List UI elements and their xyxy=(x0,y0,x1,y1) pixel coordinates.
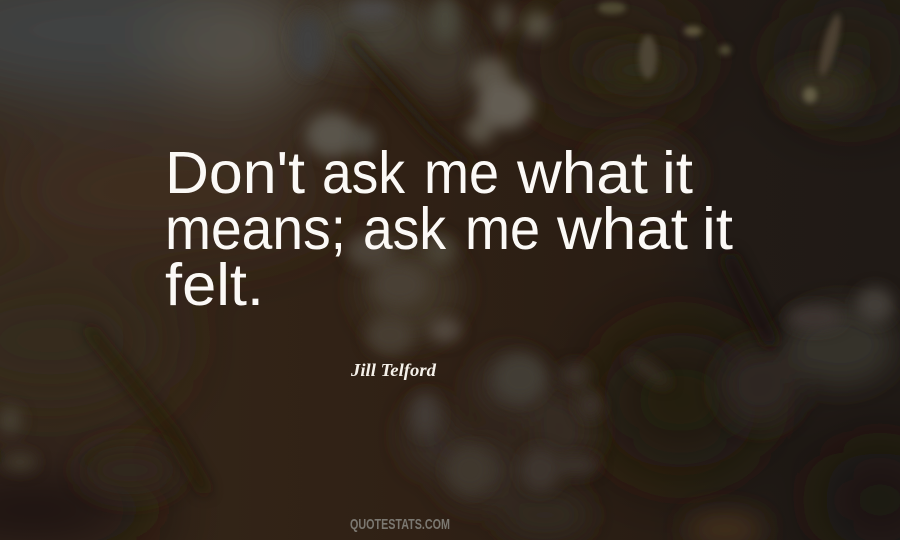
quote line 2: ask xyxy=(363,196,446,262)
quote line 2: me xyxy=(465,196,540,262)
quote line 1: what xyxy=(516,140,648,206)
quote line 2 xyxy=(165,196,733,262)
watermark: site name: QUOTESTATS.COM xyxy=(350,516,450,533)
small bright highlights xyxy=(598,2,845,103)
quote line 1 xyxy=(165,140,693,206)
quote line 1: Don't xyxy=(165,140,305,206)
quote line 1: me xyxy=(424,140,499,206)
quote line 1: ask xyxy=(322,140,405,206)
quote line 2: it xyxy=(702,196,733,262)
quote line 1: it xyxy=(662,140,693,206)
quote line 2: what xyxy=(556,196,688,262)
quote line 3: felt. xyxy=(165,252,264,318)
quote line 2: means; xyxy=(165,196,346,262)
author signature: Jill Telford xyxy=(350,360,437,380)
dark branches xyxy=(90,40,770,490)
